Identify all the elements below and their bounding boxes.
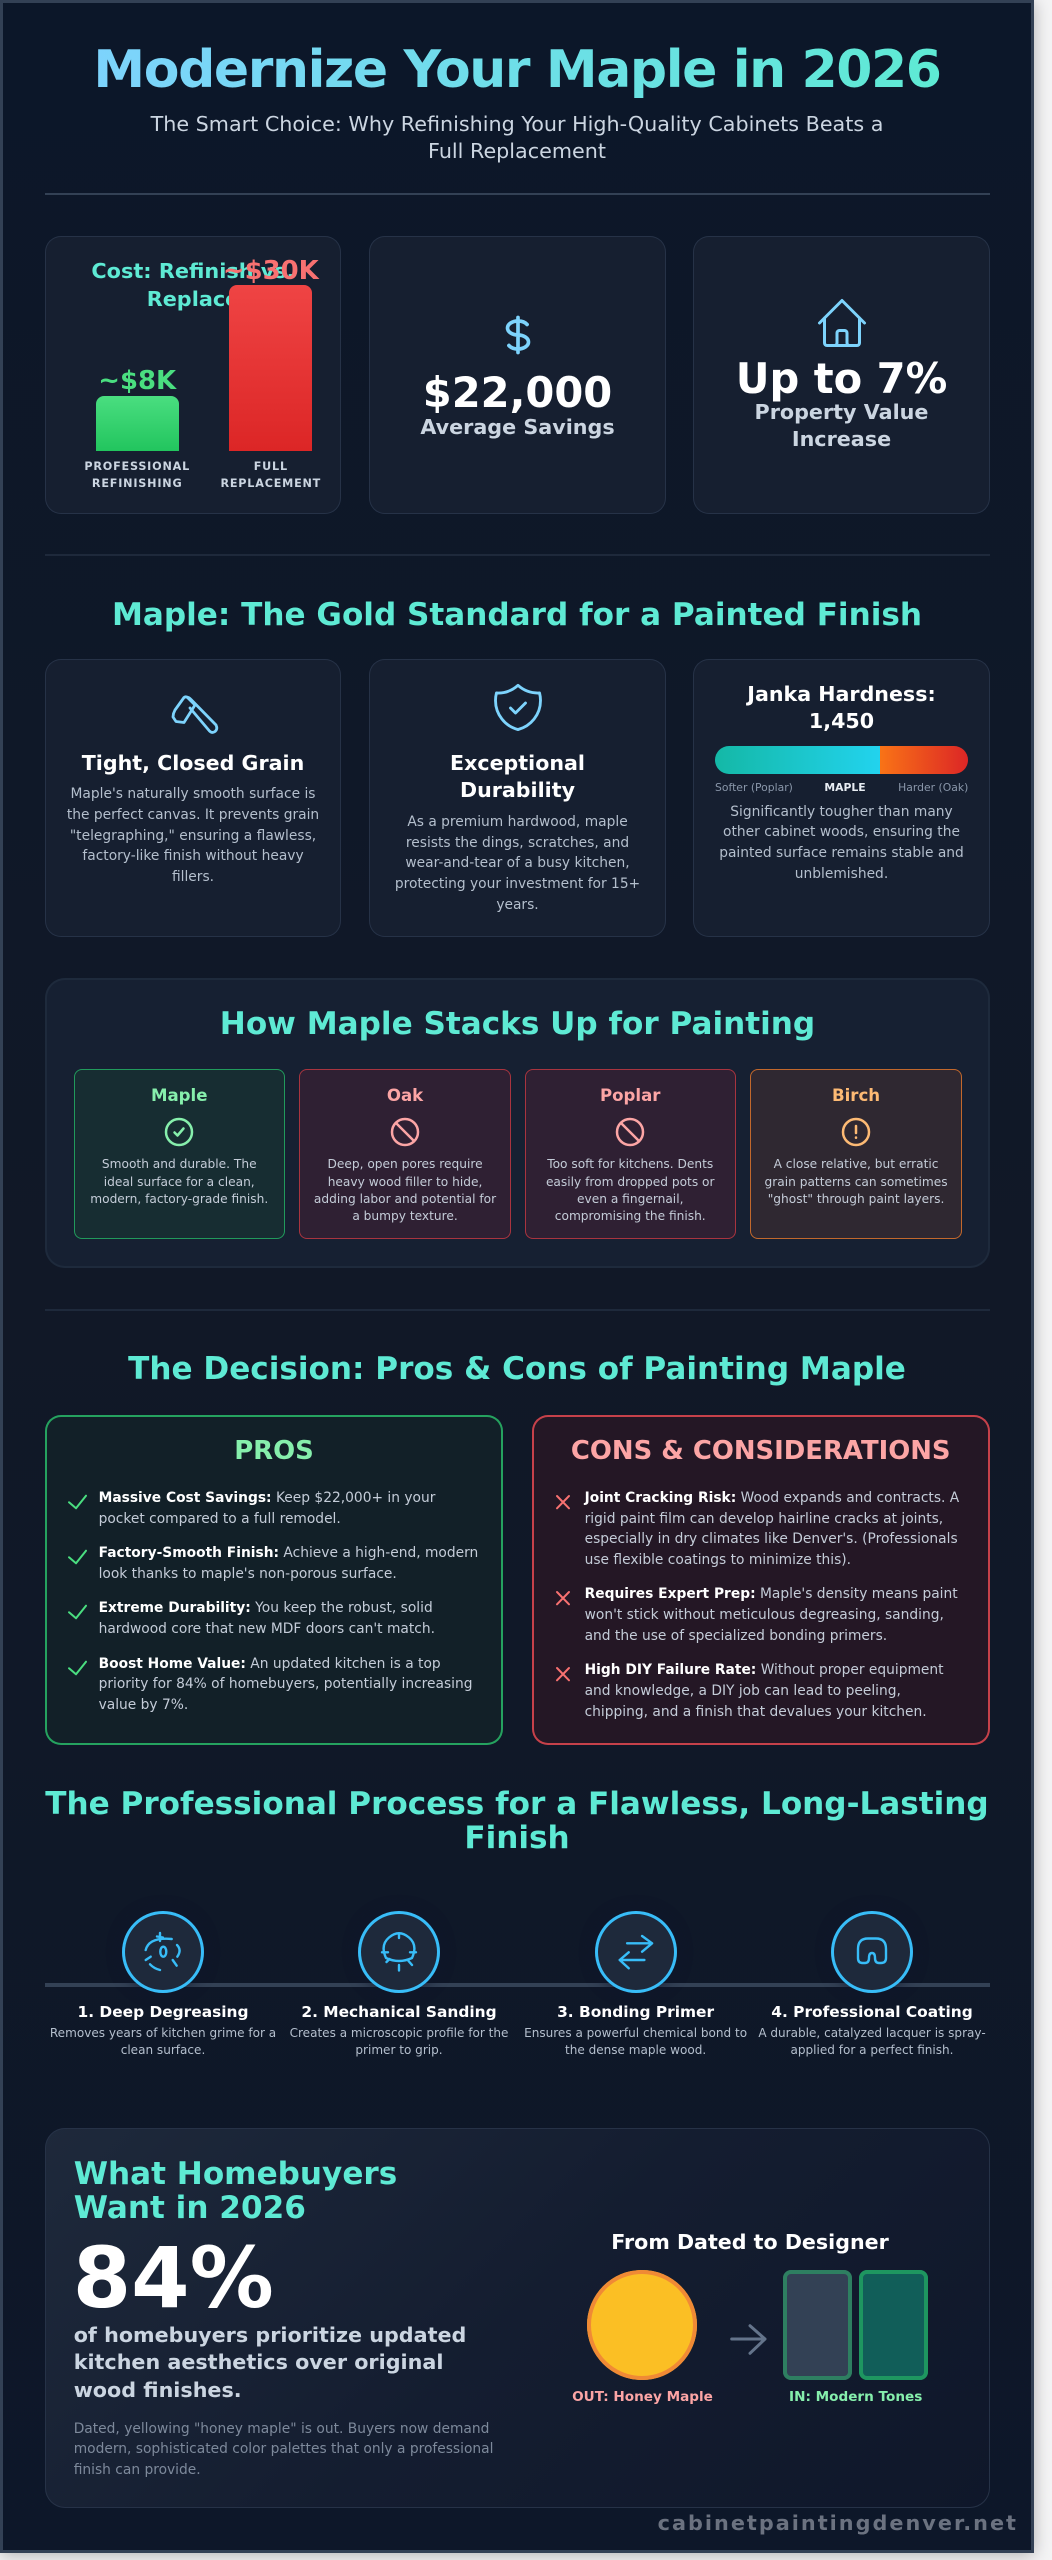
pro: home value [68, 1656, 473, 1713]
step description [754, 2025, 990, 2059]
stat caption [74, 2322, 466, 2404]
bar label: professional refinishing: REFINISHING [92, 477, 182, 490]
stat caption: wood finishes. [74, 2378, 242, 2402]
pro: cost savings: Massive Cost Savings: Keep $22,000+ in your [99, 1490, 435, 1506]
heading: professional process: The Professional Process for a Flawless, Long-Lasting [45, 1786, 989, 1822]
panel: how maple stacks up [45, 978, 990, 1268]
wood description: "ghost" through paint layers. [768, 1192, 944, 1206]
bar label: full replacement [220, 460, 321, 490]
step title: 4. Professional Coating [771, 2003, 973, 2021]
pro: smooth finish [68, 1545, 478, 1582]
bar label: professional refinishing [84, 460, 190, 490]
chart title: Replace [147, 287, 239, 311]
subtitle [150, 112, 883, 162]
card description [395, 814, 640, 913]
step description: Creates a microscopic profile for the [290, 2026, 508, 2040]
cons heading: CONS & CONSIDERATIONS [571, 1436, 951, 1466]
wood description: A close relative, but erratic [774, 1157, 939, 1171]
con: diy failure [556, 1662, 944, 1720]
supporting text [74, 2419, 493, 2481]
panel heading [74, 2157, 397, 2225]
pro: smooth finish: look thanks to maple's non-porous surface. [99, 1566, 397, 1582]
card description: fillers. [172, 869, 214, 885]
panel: cons: and the use of specialized bonding primers. [585, 1628, 887, 1644]
card description [67, 786, 319, 885]
step description: A durable, catalyzed lacquer is spray- [758, 2026, 986, 2040]
chart title: Cost: Refinish vs. [91, 259, 295, 283]
wood description: Deep, open pores require [327, 1157, 483, 1171]
panel heading: What Homebuyers [74, 2156, 397, 2192]
card description: protecting your investment for 15+ [395, 876, 640, 892]
con: diy failure: and knowledge, a DIY job can lead to peeling, [585, 1683, 901, 1699]
bar label: full replacement: REPLACEMENT [220, 477, 321, 490]
con: expert prep: won't stick without meticulous degreasing, sanding, [585, 1607, 944, 1623]
pro: durability [68, 1600, 435, 1637]
wood name: Poplar [600, 1086, 660, 1105]
arrow [730, 2323, 767, 2356]
icon: warning [842, 1118, 870, 1146]
step description: Removes years of kitchen grime for a [50, 2026, 276, 2040]
stat value: Up to 7% [736, 354, 947, 403]
color comparison [570, 2223, 930, 2413]
modern slate swatch [783, 2270, 852, 2380]
panel: pros [45, 1415, 503, 1745]
wood description: a bumpy texture. [352, 1209, 458, 1223]
heading: pros and cons: The Decision: Pros & Cons of Painting Maple [128, 1351, 906, 1387]
icon: prohibited [390, 1118, 420, 1146]
panel: cons: chipping, and a finish that devalues your kitchen. [585, 1704, 927, 1720]
modern teal swatch [859, 2270, 928, 2380]
card description: years. [496, 897, 539, 913]
process timeline [45, 1911, 990, 2057]
scale label: harder: Harder (Oak) [898, 781, 968, 794]
pro: home value: priority for 84% of homebuyers, potentially increasing [99, 1676, 473, 1692]
wood description [314, 1157, 496, 1223]
card title [746, 682, 936, 733]
pro: cost savings: pocket compared to a full remodel. [99, 1511, 341, 1527]
wood description: even a fingernail, [577, 1192, 683, 1206]
wood description: Too soft for kitchens. Dents [547, 1157, 713, 1171]
panel: property value [693, 236, 990, 514]
step title: 3. Bonding Primer [557, 2003, 714, 2021]
stat caption: kitchen aesthetics over original [74, 2350, 443, 2374]
step 3 [524, 1911, 747, 2057]
card description: "telegraphing," ensuring a flawless, [70, 828, 316, 844]
wood description: grain patterns can sometimes [765, 1175, 948, 1189]
con: expert prep [556, 1586, 958, 1644]
step description: the dense maple wood. [565, 2043, 706, 2057]
con: joint cracking [556, 1490, 959, 1568]
timeline line [45, 1983, 990, 1987]
big stat: 84% [73, 2229, 274, 2327]
step title: 1. Deep Degreasing [78, 2003, 248, 2021]
card title [450, 750, 585, 802]
in label: IN: Modern Tones [789, 2389, 922, 2405]
wood card: maple [74, 1069, 285, 1239]
panel heading: How Maple Stacks Up for Painting [220, 1006, 815, 1042]
wood card: birch [750, 1069, 962, 1239]
supporting text: finish can provide. [74, 2462, 201, 2478]
subtitle: Full Replacement [428, 138, 606, 162]
supporting text: Dated, yellowing "honey maple" is out. Buyers now demand [74, 2421, 489, 2437]
bar: full replacement [229, 285, 312, 451]
bar label: professional refinishing: PROFESSIONAL [84, 460, 190, 473]
card description: the perfect canvas. It prevents grain [67, 807, 319, 823]
pro: home value: Boost Home Value: An updated kitchen is a top [99, 1656, 441, 1672]
panel: cost bar chart [45, 236, 341, 514]
chart title [91, 259, 295, 311]
stat label: Increase [792, 427, 891, 451]
step 2 [290, 1911, 508, 2057]
pro: cost savings [68, 1490, 436, 1527]
value: ~$8K: ~$8K [98, 366, 176, 396]
panel heading: Want in 2026 [74, 2190, 306, 2226]
panel: janka hardness [693, 659, 990, 937]
panel: cons: use flexible coatings to minimize this). [585, 1552, 851, 1568]
pro: smooth finish: Factory-Smooth Finish: Achieve a high-end, modern [99, 1545, 478, 1561]
out label: OUT: Honey Maple [572, 2389, 713, 2405]
step description: clean surface. [121, 2043, 205, 2057]
card description: Significantly tougher than many [730, 804, 953, 820]
watermark: cabinetpaintingdenver.net [658, 2511, 1018, 2535]
card title: Janka Hardness: [747, 682, 936, 706]
step description [290, 2026, 508, 2057]
card description: factory-like finish without heavy [82, 848, 304, 864]
panel: what homebuyers want [45, 2128, 990, 2508]
con: expert prep: Requires Expert Prep: Maple's density means paint [585, 1586, 958, 1602]
stat caption: of homebuyers prioritize updated [74, 2323, 466, 2347]
icon: prohibited [616, 1118, 644, 1146]
wood card: poplar [525, 1069, 736, 1239]
heading: gold standard: Maple: The Gold Standard for a Painted Finish [112, 597, 922, 633]
step 1 [50, 1911, 276, 2057]
card description: resists the dings, scratches, and [406, 835, 629, 851]
card title: Tight, Closed Grain [82, 750, 304, 774]
wood description [765, 1157, 948, 1206]
wood description: easily from dropped pots or [546, 1175, 715, 1189]
wood description: modern, factory-grade finish. [90, 1192, 268, 1206]
stat label: Property Value [755, 400, 928, 424]
con: joint cracking: Joint Cracking Risk: Wood expands and contracts. A [585, 1490, 959, 1506]
honey maple swatch [587, 2270, 697, 2380]
card description: other cabinet woods, ensuring the [723, 824, 960, 840]
panel: cons [532, 1415, 990, 1745]
bar label: full replacement: FULL [254, 460, 288, 473]
heading: professional process: Finish [464, 1820, 570, 1856]
icon: shield check [494, 684, 542, 731]
wood description [90, 1157, 268, 1206]
icon: bonding arrows [595, 1911, 677, 1993]
wood description [546, 1157, 715, 1223]
step description [524, 2026, 747, 2057]
scale label: maple: MAPLE [824, 781, 866, 794]
step title: 2. Mechanical Sanding [301, 2003, 497, 2021]
hardness scale bar [715, 746, 968, 774]
supporting text: modern, sophisticated color palettes that only a professional [74, 2441, 493, 2457]
wood description: adding labor and potential for [314, 1192, 496, 1206]
icon: dollar [506, 316, 530, 354]
wood description: ideal surface for a clean, [104, 1175, 255, 1189]
step description: applied for a perfect finish. [790, 2043, 954, 2057]
card description: Maple's naturally smooth surface is [71, 786, 315, 802]
stat label [755, 400, 928, 451]
pros heading: PROS [234, 1436, 314, 1466]
panel: exceptional durability [369, 659, 666, 937]
panel: average savings [369, 236, 666, 514]
card description: unblemished. [795, 866, 888, 882]
icon: hammer [172, 695, 218, 734]
value: ~$30K: ~$30K [223, 256, 319, 286]
scale: harder range [880, 746, 968, 774]
card title: Exceptional [450, 750, 585, 774]
wood card: oak [299, 1069, 511, 1239]
icon: degreasing [122, 1911, 204, 1993]
pro: durability: Extreme Durability: You keep the robust, solid [99, 1600, 433, 1616]
panel: tight closed grain [45, 659, 341, 937]
card description: wear-and-tear of a busy kitchen, [405, 855, 630, 871]
con: diy failure: High DIY Failure Rate: Without proper equipment [585, 1662, 944, 1678]
stat label: Average Savings [420, 415, 615, 439]
step 4 [754, 1905, 990, 2060]
icon: check circle [164, 1118, 194, 1146]
panel: pros: value by 7%. [99, 1697, 188, 1713]
subtitle: The Smart Choice: Why Refinishing Your High-Quality Cabinets Beats a [151, 112, 883, 136]
step description: Ensures a powerful chemical bond to [524, 2026, 747, 2040]
step description: primer to grip. [355, 2043, 443, 2057]
card description: painted surface remains stable and [719, 845, 964, 861]
icon: sanding [358, 1911, 440, 1993]
title: Modernize Your Maple in 2026 [93, 40, 941, 100]
comparison title: From Dated to Designer [611, 2230, 889, 2254]
scale: maple range [715, 746, 880, 774]
wood description: Smooth and durable. The [102, 1157, 257, 1171]
wood description: compromising the finish. [555, 1209, 706, 1223]
bar: professional refinishing [96, 396, 179, 451]
scale label: softer: Softer (Poplar) [715, 781, 793, 794]
card description: As a premium hardwood, maple [407, 814, 628, 830]
header [93, 40, 941, 162]
wood name: Birch [832, 1086, 880, 1105]
icon: house [818, 298, 866, 347]
pro: durability: hardwood core that new MDF doors can't match. [99, 1621, 435, 1637]
card title: 1,450 [809, 709, 874, 733]
card title: Durability [460, 778, 575, 802]
wood name: Oak [387, 1086, 423, 1105]
wood name: Maple [151, 1086, 208, 1105]
wood description: heavy wood filler to hide, [328, 1175, 482, 1189]
con: joint cracking: rigid paint film can develop hairline cracks at joints, [585, 1511, 943, 1527]
stat value: $22,000 [423, 368, 612, 417]
icon: coating [831, 1911, 913, 1993]
card description [719, 804, 964, 882]
panel: cons: especially in dry climates like Denver's. (Professionals [585, 1531, 958, 1547]
step description [50, 2026, 276, 2057]
heading: professional process [45, 1786, 989, 1856]
